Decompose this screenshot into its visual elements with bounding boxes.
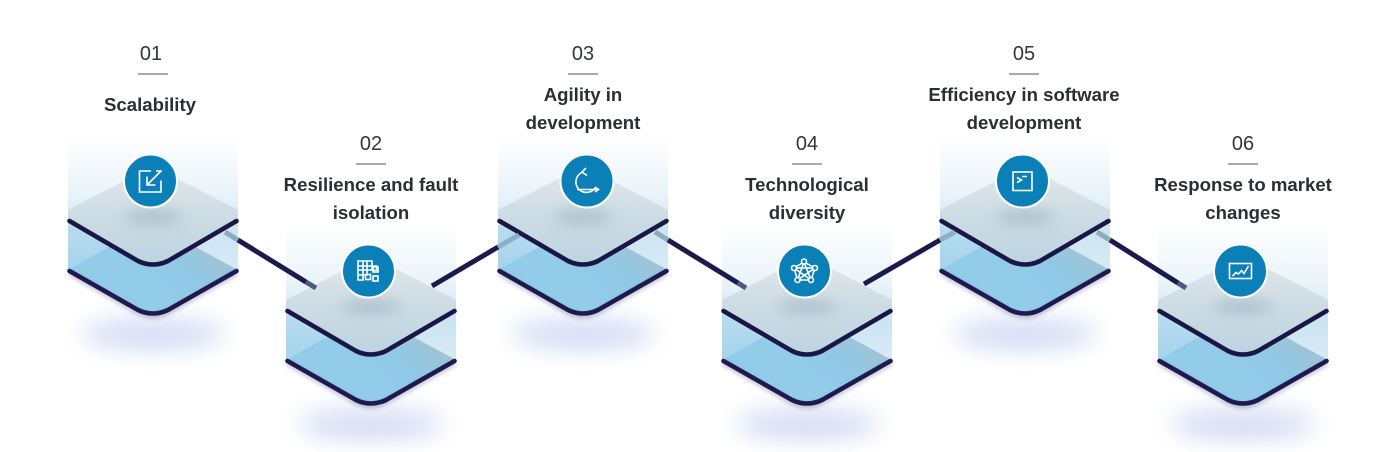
icon: grid with squares — [342, 244, 395, 298]
heading: Efficiency in software development: development — [967, 112, 1081, 133]
block 2 — [286, 225, 456, 446]
panel: step 5 efficiency — [928, 43, 1120, 356]
icon: terminal — [996, 154, 1049, 208]
number 04: 04 — [796, 133, 818, 155]
panel: step 3 agility — [498, 43, 668, 356]
block 4 — [722, 225, 892, 446]
heading: Response to market changes: changes — [1205, 202, 1281, 223]
heading: Response to market changes: Response to market — [1154, 174, 1332, 195]
block 3 — [498, 135, 668, 356]
connector: step 2 to 3 — [432, 235, 519, 286]
heading: Efficiency in software development: Efficiency in software — [928, 84, 1120, 105]
heading: Scalability: Scalability — [104, 94, 197, 115]
block 5 — [940, 135, 1110, 356]
number 01: 01 — [140, 43, 162, 65]
heading: Agility in development: development — [526, 112, 640, 133]
icon: cycle arrow — [560, 154, 614, 208]
panel: step 1 scalability — [68, 43, 238, 356]
panel: step 6 response to market — [1154, 133, 1332, 446]
number 05: 05 — [1013, 43, 1035, 65]
panel: step 2 resilience — [284, 133, 458, 446]
heading: Technological diversity: Technological — [745, 174, 869, 195]
connector: step 1 to 2 — [225, 232, 316, 288]
heading: Technological diversity: diversity — [769, 202, 846, 223]
number 03: 03 — [572, 43, 594, 65]
connector: step 3 to 4 — [655, 232, 746, 288]
connector: step 5 to 6 — [1097, 232, 1186, 288]
connector: step 4 to 5 — [864, 232, 955, 284]
block 6 — [1158, 225, 1328, 446]
panel: step 4 technological diversity — [722, 133, 892, 446]
icon: line chart — [1214, 244, 1267, 298]
heading: Agility in development: Agility in — [544, 84, 622, 105]
heading: Resilience and fault isolation: isolation — [333, 202, 409, 223]
block 1 — [68, 135, 238, 356]
icon: expand arrow — [124, 154, 177, 208]
number 02: 02 — [360, 133, 382, 155]
heading: Resilience and fault isolation: Resilience and fault — [284, 174, 458, 195]
number 06: 06 — [1232, 133, 1254, 155]
icon: network star — [778, 244, 831, 298]
